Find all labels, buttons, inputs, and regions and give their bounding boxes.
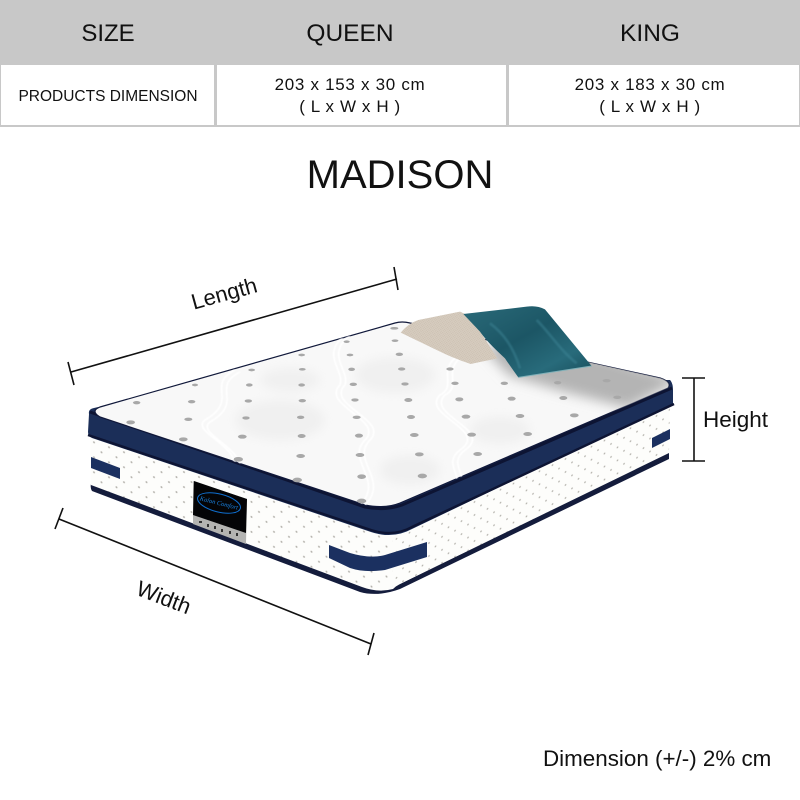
left side panel	[90, 435, 393, 591]
table header band	[0, 0, 800, 65]
label silver base	[193, 481, 247, 544]
king dimensions	[575, 75, 725, 116]
quilted top surface	[95, 322, 669, 507]
mattress	[88, 306, 680, 594]
label icons	[199, 521, 238, 536]
right end handle	[652, 429, 670, 448]
queen dimensions: 203 x 153 x 30 cm	[275, 75, 425, 94]
header: queen: QUEEN	[306, 20, 394, 47]
title: MADISON	[307, 153, 493, 197]
left end handle	[91, 457, 120, 479]
front handle	[329, 542, 427, 571]
band upper edge	[90, 388, 672, 509]
length label: Length	[188, 272, 260, 315]
width dimension line	[55, 508, 374, 655]
height dimension bracket	[682, 378, 705, 461]
tolerance note: Dimension (+/-) 2% cm	[543, 746, 771, 771]
label logo oval	[195, 489, 243, 517]
bottom border strip	[91, 452, 669, 594]
band seam line	[88, 404, 674, 533]
brand label	[193, 481, 247, 544]
beige pillow	[401, 312, 497, 364]
size table	[0, 0, 800, 127]
teal pillow	[463, 306, 592, 377]
shadow on far corner	[480, 345, 680, 408]
tufting buttons	[392, 327, 621, 478]
queen dimensions	[275, 75, 425, 116]
width label: Width	[133, 576, 195, 619]
navy pillow-top band	[88, 380, 673, 535]
row label: PRODUCTS DIMENSION	[18, 88, 198, 105]
right side panel	[393, 405, 670, 589]
quilting pattern	[430, 488, 435, 490]
header: king: KING	[620, 20, 680, 47]
queen dimensions: ( L x W x H )	[299, 97, 401, 116]
label logo text: Kalon Comfort	[198, 495, 239, 512]
king dimensions: ( L x W x H )	[599, 97, 701, 116]
king dimensions: 203 x 183 x 30 cm	[575, 75, 725, 94]
label black panel	[193, 481, 247, 533]
height label: Height	[703, 407, 769, 432]
length dimension line	[68, 267, 398, 385]
header: size: SIZE	[81, 20, 135, 47]
